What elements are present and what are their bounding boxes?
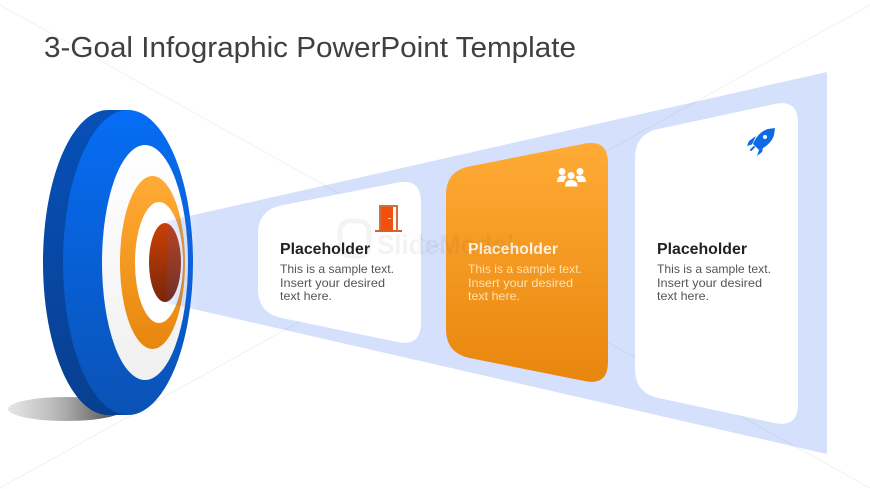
card 2 background [446,143,608,382]
card 1 heading: Placeholder [280,241,370,258]
target shadow [8,397,124,421]
card 2 text [468,262,582,303]
card 2 text: text here. [468,289,520,303]
card 1 background [258,182,421,343]
target white ring [102,145,188,380]
card 2 text: This is a sample text. [468,262,582,276]
card 3 text: text here. [657,289,709,303]
target [43,110,193,415]
card 3: white [635,103,798,424]
icon: rocket [747,128,775,156]
card 1 text: Insert your desired [280,276,385,290]
card 3 heading: Placeholder [657,241,747,258]
card 3 text [657,262,771,303]
icon: door [375,205,402,232]
projection beam [167,72,827,454]
card 2 heading: Placeholder [468,241,558,258]
card 2: orange [446,143,608,382]
target side [43,110,128,415]
card 1: white [258,182,421,343]
card 1 text [280,262,394,303]
card 1 text: This is a sample text. [280,262,394,276]
target orange ring [120,176,185,349]
card 3 background [635,103,798,424]
watermark [340,221,514,260]
icon: people [557,168,586,186]
watermark: SlideModel [377,229,514,260]
card 2 text: Insert your desired [468,276,573,290]
target inner white ring [135,202,183,323]
target outer blue ring [63,110,193,415]
card 3 text: Insert your desired [657,276,762,290]
card 3 text: This is a sample text. [657,262,771,276]
title: 3-Goal Infographic PowerPoint Template [44,32,576,64]
target bullseye [149,223,181,302]
card 1 text: text here. [280,289,332,303]
